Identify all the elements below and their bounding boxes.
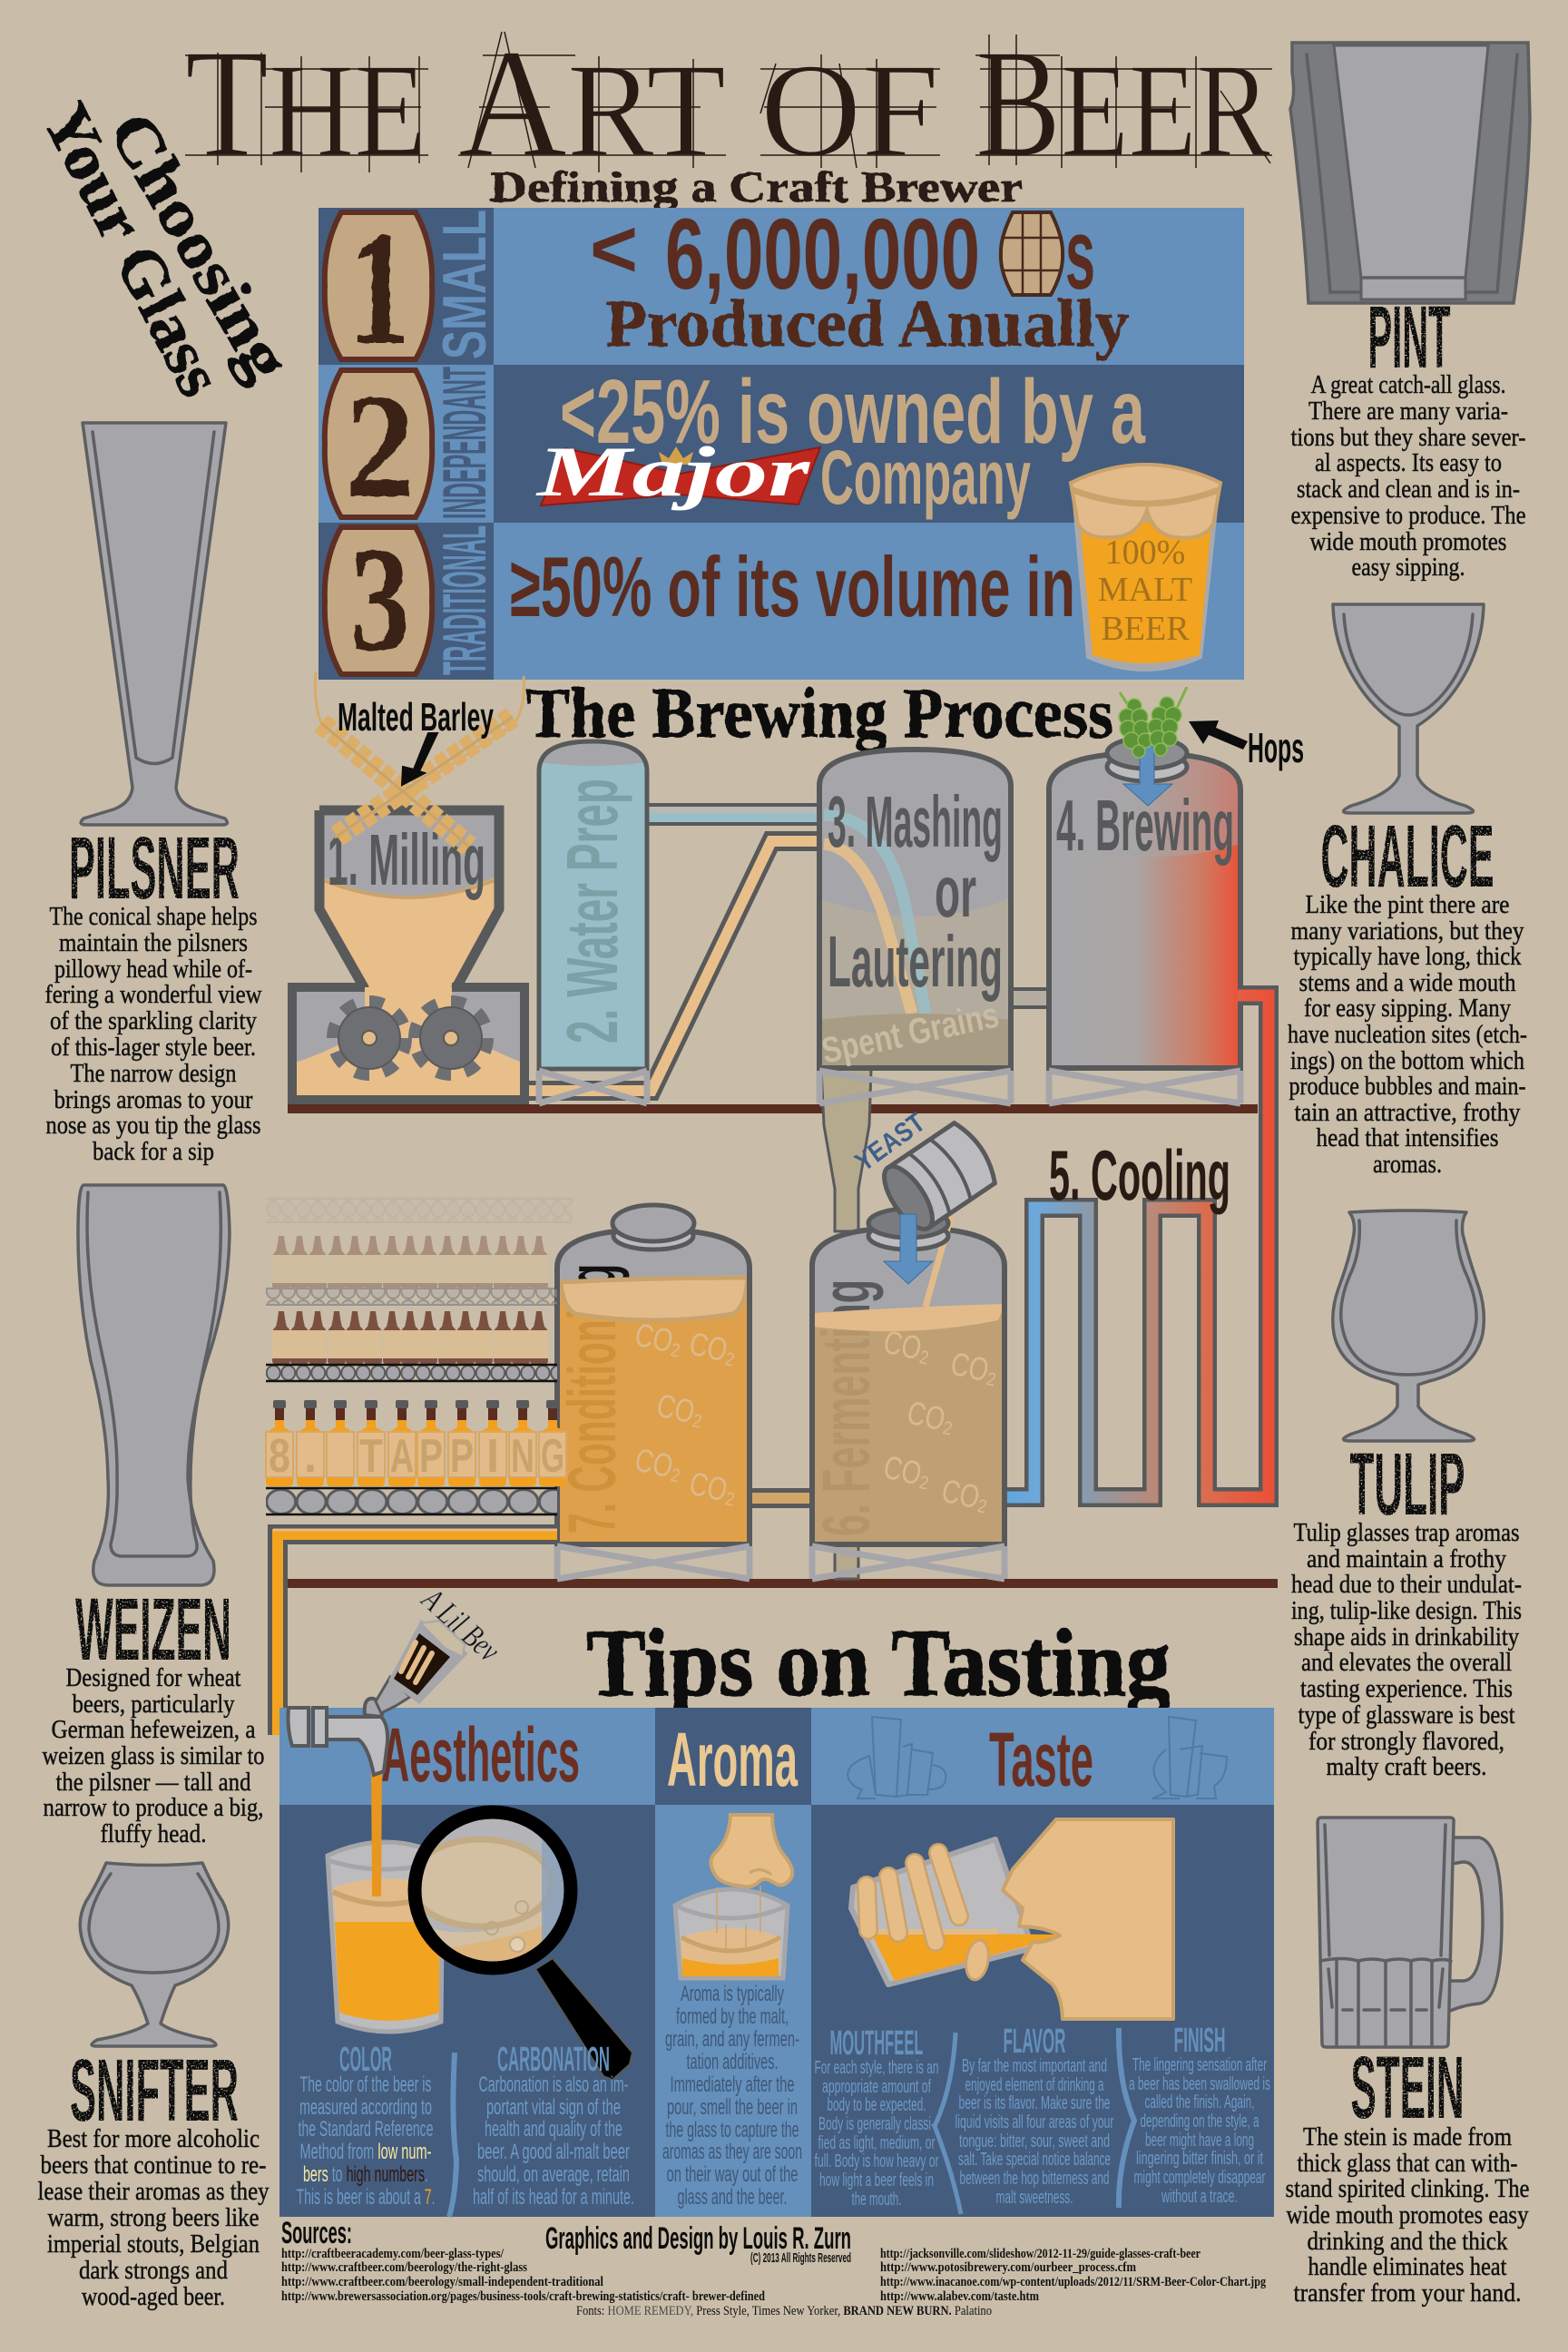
text: finish description: without a trace. bbox=[1161, 2187, 1238, 2207]
co2 bubbles: CO₂ bbox=[686, 1465, 740, 1511]
text: aroma description: Aroma is typically bbox=[681, 1982, 784, 2006]
footer: sources right: http://www.potosibrewery.com/ourbeer_process.cfm bbox=[880, 2260, 1136, 2275]
footer: sources left: http://craftbeeracademy.com/beer-glass-types/ bbox=[281, 2247, 505, 2261]
pipe: grain to mash bbox=[529, 841, 821, 1091]
text: flavor description: enjoyed element of drinking a bbox=[965, 2075, 1104, 2095]
heading: choosing your glass: Your Glass bbox=[29, 92, 238, 407]
text: carbonation description: portant vital sign of the bbox=[486, 2095, 621, 2120]
text: tulip description: shape aids in drinkability bbox=[1294, 1623, 1519, 1651]
divider bbox=[449, 2053, 456, 2217]
glass: chalice bbox=[1333, 604, 1484, 813]
text: stein description bbox=[1285, 2123, 1530, 2308]
icon: magnifying glass bbox=[410, 1812, 632, 2080]
stat: six million barrels: s bbox=[1065, 199, 1095, 310]
icon: barrel numeral 1: 1 bbox=[348, 198, 410, 378]
text: flavor description bbox=[955, 2056, 1114, 2208]
text: pint description: wide mouth promotes bbox=[1310, 528, 1506, 556]
text: stein description: drinking and the thick bbox=[1307, 2228, 1508, 2256]
footer: sources left: http://www.brewersassociation.org/pages/business-tools/craft-brewing-statistics/craft- brewer-defined bbox=[281, 2289, 766, 2304]
stat: owned by: <25% is owned by a bbox=[560, 361, 1146, 463]
heading: defining a craft brewer: Defining a Craft Brewer bbox=[490, 163, 1023, 211]
text: pint description bbox=[1290, 371, 1526, 582]
text: snifter description: imperial stouts, Belgian bbox=[47, 2230, 260, 2259]
text: carbonation description: half of its head for a minute. bbox=[473, 2185, 634, 2210]
co2 bubbles: CO₂ bbox=[938, 1472, 993, 1518]
pipe: conditioner to tap bbox=[273, 1530, 557, 1735]
text: chalice description: head that intensifies bbox=[1316, 1124, 1499, 1152]
text: flavor description: salt. Take special notice balance bbox=[958, 2150, 1111, 2170]
stat: fifty percent volume: ≥50% of its volume in bbox=[510, 539, 1075, 634]
text: pint description: A great catch-all glass. bbox=[1310, 371, 1506, 399]
step 3: mashing or lautering: Spent Grains bbox=[818, 995, 1003, 1072]
label: 8. tapping: G bbox=[541, 1430, 564, 1483]
icon: face drinking bbox=[1003, 1819, 1173, 2019]
icon: malt beer glass: 100% bbox=[1105, 534, 1185, 572]
step 3: mashing or lautering bbox=[818, 750, 1011, 1103]
bottle row: faded bbox=[266, 1236, 557, 1305]
text: color description: the Standard Reference bbox=[298, 2117, 434, 2141]
text: mouthfeel description: For each style, there is an bbox=[815, 2058, 938, 2078]
label: 8. tapping: P bbox=[450, 1430, 474, 1483]
gears bbox=[335, 1004, 485, 1073]
icon: barrel numeral 3 bbox=[325, 516, 432, 682]
text: mouthfeel description: Body is generally classi- bbox=[818, 2114, 935, 2134]
label: 8. tapping: 8 bbox=[269, 1430, 290, 1483]
arrow: barley to mill bbox=[402, 733, 437, 785]
title: ART bbox=[458, 17, 726, 189]
text: mouthfeel description bbox=[815, 2058, 939, 2210]
label: fermenting: 6. Fermenting bbox=[808, 1279, 884, 1536]
panel: tips on tasting bbox=[279, 1580, 1274, 2217]
footer: sources left bbox=[281, 2247, 766, 2304]
text: stein description: stand spirited clinking. The bbox=[1285, 2175, 1530, 2203]
text: aroma description bbox=[662, 1982, 802, 2210]
text: pilsner description: nose as you tip the glass bbox=[45, 1112, 261, 1140]
footer: sources right: http://www.alabev.com/taste.htm bbox=[880, 2289, 1039, 2304]
text: chalice description: aromas. bbox=[1373, 1151, 1442, 1179]
glass: pint bbox=[1290, 43, 1530, 303]
glass: tulip bbox=[1333, 1210, 1484, 1441]
title: OF bbox=[760, 36, 939, 185]
text: color description: This is beer is about a 7. bbox=[296, 2185, 435, 2210]
text: chalice description: tain an attractive, frothy bbox=[1294, 1099, 1521, 1127]
text: produced anually: Produced Anually bbox=[605, 287, 1129, 361]
text: tulip description: and elevates the overall bbox=[1301, 1649, 1512, 1677]
text: mouthfeel description: full. Body is how heavy or bbox=[815, 2151, 939, 2171]
pipe: mash to brew bbox=[1007, 989, 1053, 1007]
icon: hops bbox=[1119, 687, 1187, 758]
mill box bbox=[292, 987, 524, 1100]
text: stein description: wide mouth promotes easy bbox=[1287, 2201, 1528, 2230]
pipe: fermenter to conditioner bbox=[744, 1488, 817, 1508]
title bbox=[185, 17, 1272, 189]
column: carbonation bbox=[473, 2041, 634, 2210]
text: pint description: al aspects. Its easy to bbox=[1315, 449, 1502, 477]
text: chalice description: produce bubbles and main- bbox=[1289, 1073, 1526, 1101]
text: finish description: The lingering sensation after bbox=[1132, 2055, 1267, 2075]
text: color description: Method from low num- bbox=[299, 2140, 431, 2164]
text: PILSNER bbox=[69, 818, 240, 917]
divider bbox=[935, 2033, 961, 2214]
label: 8. tapping bbox=[269, 1430, 564, 1483]
text: carbonation description: Carbonation is also an im- bbox=[479, 2073, 628, 2097]
shelf lines bbox=[288, 1104, 1278, 1588]
label: 8. tapping: P bbox=[419, 1430, 443, 1483]
text: weizen description: beers, particularly bbox=[73, 1690, 234, 1719]
text: SNIFTER bbox=[70, 2041, 239, 2140]
icon: barrel numeral 2 bbox=[325, 363, 432, 529]
glass: pilsner bbox=[81, 423, 227, 825]
text: tulip description: Tulip glasses trap aromas bbox=[1294, 1519, 1519, 1547]
label: milling: 1. Milling bbox=[328, 819, 485, 900]
heading: tips on tasting: Tips on Tasting bbox=[586, 1610, 1171, 1716]
text: mouthfeel description: fied as light, medium, or bbox=[818, 2133, 936, 2153]
text: pint description: easy sipping. bbox=[1352, 554, 1465, 582]
text: chalice description: stems and a wide mouth bbox=[1299, 969, 1515, 997]
arrow: yeast pour bbox=[884, 1214, 933, 1284]
text: finish description: beer might have a long bbox=[1145, 2131, 1254, 2151]
step 2: water prep: 2. Water Prep bbox=[552, 779, 632, 1044]
logo: major bbox=[534, 432, 820, 511]
text: pilsner description: The conical shape helps bbox=[49, 903, 258, 931]
step 3: mashing or lautering: Lautering bbox=[828, 921, 1003, 1002]
column: finish: FINISH bbox=[1174, 2022, 1225, 2060]
label: 8. tapping: I bbox=[486, 1430, 499, 1483]
footer: fonts credit: Fonts: HOME REMEDY, Press Style, Times New Yorker, BRAND NEW BURN. Palatino bbox=[576, 2304, 992, 2318]
footer: sources heading: Sources: bbox=[281, 2216, 352, 2250]
text: weizen description: weizen glass is similar to bbox=[42, 1742, 265, 1770]
arrow: hops label bbox=[1189, 720, 1248, 750]
text: tulip description: tasting experience. This bbox=[1300, 1675, 1513, 1703]
text: mouthfeel description: how light a beer feels in bbox=[819, 2171, 934, 2190]
column: carbonation: CARBONATION bbox=[497, 2041, 610, 2079]
text: snifter description: wood-aged beer. bbox=[82, 2283, 225, 2311]
text: tulip description bbox=[1291, 1519, 1522, 1781]
icon: nose bbox=[710, 1815, 792, 1886]
tap handle: A Lil Bev bbox=[415, 1580, 507, 1669]
text: aroma description: aromas as they are soon bbox=[662, 2140, 802, 2164]
icon: malt beer glass bbox=[1071, 465, 1220, 670]
column: flavor: FLAVOR bbox=[1004, 2023, 1065, 2061]
label: cooling: 5. Cooling bbox=[1049, 1135, 1230, 1215]
text: WEIZEN bbox=[75, 1580, 231, 1679]
title: THE bbox=[185, 17, 426, 189]
step 8: tapping bottles bbox=[266, 1199, 573, 1515]
co2 bubbles: CO₂ bbox=[880, 1448, 935, 1494]
label: 8. tapping: T bbox=[359, 1430, 383, 1483]
text: snifter description: warm, strong beers like bbox=[47, 2204, 260, 2232]
icon: barrel bbox=[1001, 212, 1063, 295]
label: small: SMALL bbox=[430, 210, 499, 359]
label: hops: Hops bbox=[1248, 724, 1304, 771]
text: pilsner description bbox=[45, 903, 262, 1166]
footer: credit: Graphics and Design by Louis R. Zurn bbox=[545, 2221, 851, 2256]
text: stein description: handle eliminates heat bbox=[1308, 2253, 1507, 2281]
text: color description: The color of the beer is bbox=[299, 2073, 432, 2097]
text: PINT bbox=[1368, 288, 1450, 387]
text: chalice description: for easy sipping. Many bbox=[1304, 995, 1511, 1023]
logo: major: Major bbox=[534, 432, 810, 511]
panel: craft brewer definition: TRADITIONAL bbox=[430, 525, 499, 675]
step 2: water prep bbox=[539, 741, 647, 1103]
text: 3. Mashing bbox=[828, 781, 1003, 862]
text: chalice description: typically have long, thick bbox=[1294, 943, 1521, 971]
heading: aesthetics: Aesthetics bbox=[381, 1712, 580, 1798]
co2 bubbles bbox=[632, 1316, 740, 1511]
icon: yeast can bbox=[850, 1107, 1002, 1284]
bottle row: labelled bbox=[266, 1311, 557, 1381]
icon: beer tap bbox=[289, 1580, 507, 1775]
label: 8. tapping: A bbox=[390, 1430, 414, 1483]
glass: weizen bbox=[78, 1185, 230, 1585]
text: weizen description bbox=[42, 1664, 265, 1848]
text: weizen description: Designed for wheat bbox=[65, 1664, 241, 1692]
text: carbonation description bbox=[473, 2073, 634, 2210]
text: aroma description: glass and the beer. bbox=[677, 2185, 788, 2210]
text: flavor description: liquid visits all four areas of your bbox=[955, 2112, 1114, 2132]
stat: six million barrels: < bbox=[590, 204, 638, 295]
heading: aroma: Aroma bbox=[667, 1717, 799, 1802]
column: mouthfeel bbox=[815, 2024, 939, 2210]
tap handle bbox=[376, 1580, 507, 1713]
column: color: COLOR bbox=[339, 2041, 392, 2079]
text: carbonation description: health and quality of the bbox=[485, 2117, 622, 2141]
text: tulip description: head due to their undulat- bbox=[1291, 1571, 1522, 1599]
text: weizen description: fluffy head. bbox=[100, 1820, 207, 1848]
step 4: brewing: 4. Brewing bbox=[1056, 785, 1234, 866]
footer: sources right: http://jacksonville.com/slideshow/2012-11-29/guide-glasses-craft-beer bbox=[880, 2247, 1200, 2261]
funnel: mash drain bbox=[821, 1069, 871, 1579]
label: 8. tapping: N bbox=[511, 1430, 534, 1483]
co2 bubbles bbox=[880, 1323, 1002, 1518]
step 6: fermenting bbox=[808, 1209, 1004, 1579]
text: mouthfeel description: appropriate amount of bbox=[822, 2077, 931, 2097]
text: flavor description: By far the most important and bbox=[962, 2056, 1107, 2076]
text: weizen description: German hefeweizen, a bbox=[51, 1716, 256, 1744]
icon: tilted glass bbox=[851, 1839, 1060, 1984]
text: pint description: stack and clean and is in- bbox=[1297, 475, 1520, 504]
step 1: milling bbox=[292, 810, 524, 1100]
text: chalice description: have nucleation sites (etch- bbox=[1288, 1021, 1527, 1049]
text: snifter description: lease their aromas as they bbox=[38, 2178, 269, 2206]
text: company: Company bbox=[820, 435, 1031, 520]
pipe: water to mash bbox=[647, 805, 821, 824]
column: mouthfeel: MOUTHFEEL bbox=[829, 2024, 924, 2063]
icon: fingers bbox=[867, 1853, 992, 1982]
text: chalice description: Like the pint there are bbox=[1305, 891, 1510, 919]
banner backgrounds bbox=[318, 208, 1244, 680]
text: snifter description: beers that continue to re- bbox=[40, 2151, 267, 2180]
heading: choosing your glass: Choosing bbox=[94, 100, 305, 392]
text: tulip description: for strongly flavored, bbox=[1308, 1728, 1504, 1756]
icon: malt beer glass: MALT bbox=[1098, 571, 1192, 609]
text: pilsner description: pillowy head while of- bbox=[54, 956, 252, 984]
text: finish description bbox=[1129, 2055, 1270, 2207]
text: aroma description: grain, and any fermen- bbox=[665, 2027, 799, 2052]
text: pilsner description: The narrow design bbox=[71, 1060, 236, 1088]
icon: malt beer glass: BEER bbox=[1101, 610, 1190, 648]
footer: sources left: http://www.craftbeer.com/beerology/the-right-glass bbox=[281, 2260, 527, 2275]
text: flavor description: between the hop bitterness and bbox=[960, 2169, 1109, 2189]
footer: sources right: http://www.inacanoe.com/wp-content/uploads/2012/11/SRM-Beer-Color-Chart.jpg bbox=[880, 2275, 1266, 2289]
glass: snifter bbox=[80, 1863, 229, 2046]
text: snifter description: Best for more alcoholic bbox=[47, 2125, 260, 2153]
glass: stein bbox=[1318, 1818, 1502, 2047]
co2 bubbles: CO₂ bbox=[653, 1387, 708, 1433]
column: color bbox=[296, 2041, 435, 2210]
co2 bubbles: CO₂ bbox=[632, 1441, 686, 1487]
step 4: brewing bbox=[1049, 738, 1240, 1103]
heading: the brewing process: The Brewing Process bbox=[526, 673, 1113, 752]
co2 bubbles: CO₂ bbox=[947, 1345, 1002, 1391]
icon: glass outlines left bbox=[848, 1717, 946, 1798]
heading: taste: Taste bbox=[989, 1717, 1093, 1802]
pour stream bbox=[371, 1765, 382, 1896]
step 3: mashing or lautering: or bbox=[935, 851, 976, 932]
text: chalice description: ings) on the bottom which bbox=[1290, 1047, 1524, 1075]
text: pilsner description: maintain the pilsners bbox=[59, 929, 248, 957]
co2 bubbles: CO₂ bbox=[880, 1323, 935, 1369]
text: pint description: There are many varia- bbox=[1308, 397, 1508, 426]
icon: yeast can: YEAST bbox=[850, 1107, 931, 1178]
text: aroma description: the glass to capture the bbox=[666, 2118, 799, 2142]
text: flavor description: malt sweetness. bbox=[996, 2188, 1073, 2208]
text: aroma description: on their way out of the bbox=[666, 2162, 799, 2187]
text: weizen description: narrow to produce a big, bbox=[44, 1794, 263, 1822]
text: aroma description: Immediately after the bbox=[670, 2073, 795, 2097]
text: pilsner description: fering a wonderful view bbox=[45, 981, 262, 1009]
faint conveyor row bbox=[266, 1199, 573, 1223]
title: BEER bbox=[975, 17, 1270, 189]
text: chalice description: many variations, but they bbox=[1290, 917, 1524, 946]
footer: sources left: http://www.craftbeer.com/beerology/small-independent-traditional bbox=[281, 2275, 603, 2289]
text: color description: measured according to bbox=[299, 2095, 432, 2120]
text: pilsner description: of the sparkling clarity bbox=[50, 1007, 257, 1035]
panel: craft brewer definition: INDEPENDANT bbox=[430, 367, 499, 519]
text: stein description: transfer from your hand. bbox=[1294, 2279, 1521, 2308]
text: aroma description: pour, smell the beer in bbox=[667, 2095, 798, 2120]
text: color description: bers to high numbers. bbox=[303, 2162, 428, 2187]
text: finish description: depending on the style, a bbox=[1140, 2112, 1259, 2132]
divider bbox=[1119, 2028, 1134, 2208]
text: pint description: expensive to produce. The bbox=[1290, 502, 1526, 530]
icon: beer glass being poured bbox=[328, 1842, 443, 2032]
text: color description bbox=[296, 2073, 435, 2210]
text: chalice description bbox=[1288, 891, 1527, 1179]
text: pilsner description: of this-lager style beer. bbox=[51, 1034, 256, 1062]
column: flavor bbox=[955, 2023, 1114, 2208]
text: snifter description bbox=[38, 2125, 269, 2311]
text: tulip description: malty craft beers. bbox=[1327, 1753, 1486, 1781]
footer: sources right bbox=[880, 2247, 1266, 2304]
text: mouthfeel description: the mouth. bbox=[851, 2190, 902, 2210]
text: pilsner description: back for a sip bbox=[93, 1138, 214, 1166]
bottle row: tapping bbox=[266, 1400, 566, 1515]
text: finish description: might completely disappear bbox=[1134, 2168, 1266, 2188]
arrow: hops into kettle bbox=[1123, 744, 1172, 806]
text: tulip description: ing, tulip-like design. This bbox=[1291, 1597, 1522, 1625]
icon: wheat stalks bbox=[315, 671, 524, 847]
text: carbonation description: beer. A good all-malt beer bbox=[477, 2140, 630, 2164]
text: tulip description: type of glassware is best bbox=[1298, 1701, 1515, 1730]
text: carbonation description: should, on average, retain bbox=[477, 2162, 630, 2187]
label: malted barley: Malted Barley bbox=[338, 695, 494, 740]
stat: six million barrels: 6,000,000 bbox=[665, 199, 980, 310]
text: tulip description: and maintain a frothy bbox=[1307, 1545, 1506, 1573]
text: pint description: tions but they share sever- bbox=[1290, 424, 1526, 452]
text: mouthfeel description: body to be expected. bbox=[828, 2095, 926, 2115]
mill hopper bbox=[319, 810, 499, 989]
text: stein description: thick glass that can with- bbox=[1298, 2150, 1517, 2178]
text: aroma description: tation additives. bbox=[686, 2050, 779, 2074]
text: finish description: lingering bitter finish, or it bbox=[1136, 2149, 1263, 2169]
text: weizen description: the pilsner — tall and bbox=[56, 1769, 250, 1797]
column: finish bbox=[1129, 2022, 1270, 2207]
pipe: cooling coil bbox=[1002, 995, 1269, 1497]
text: finish description: a beer has been swallowed is bbox=[1129, 2074, 1270, 2094]
label: 8. tapping: . bbox=[304, 1430, 317, 1483]
icon: barrel numeral 2: 2 bbox=[345, 363, 415, 529]
text: stein description: The stein is made from bbox=[1303, 2123, 1512, 2151]
label: conditioning: 7. Conditioning bbox=[554, 1264, 630, 1534]
panel: craft brewer definition bbox=[318, 198, 1244, 682]
icon: glass outlines right bbox=[1152, 1717, 1227, 1798]
icon: aroma glass bbox=[675, 1886, 788, 1978]
panel backgrounds bbox=[279, 1708, 1274, 2217]
footer: copyright: (C) 2013 All Rights Reserved bbox=[750, 2250, 851, 2266]
co2 bubbles: CO₂ bbox=[904, 1394, 958, 1440]
text: pilsner description: brings aromas to your bbox=[54, 1086, 253, 1114]
text: flavor description: tongue: bitter, sour, sweet and bbox=[959, 2132, 1110, 2151]
step 7: conditioning bbox=[554, 1205, 750, 1579]
co2 bubbles: CO₂ bbox=[686, 1325, 740, 1371]
icon: barrel numeral 3: 3 bbox=[350, 516, 410, 682]
text: finish description: called the finish. Again, bbox=[1145, 2092, 1254, 2112]
co2 bubbles: CO₂ bbox=[632, 1316, 686, 1362]
text: snifter description: dark strongs and bbox=[79, 2257, 228, 2285]
text: flavor description: beer is its flavor. Make sure the bbox=[958, 2093, 1111, 2113]
text: aroma description: formed by the malt, bbox=[676, 2004, 789, 2029]
